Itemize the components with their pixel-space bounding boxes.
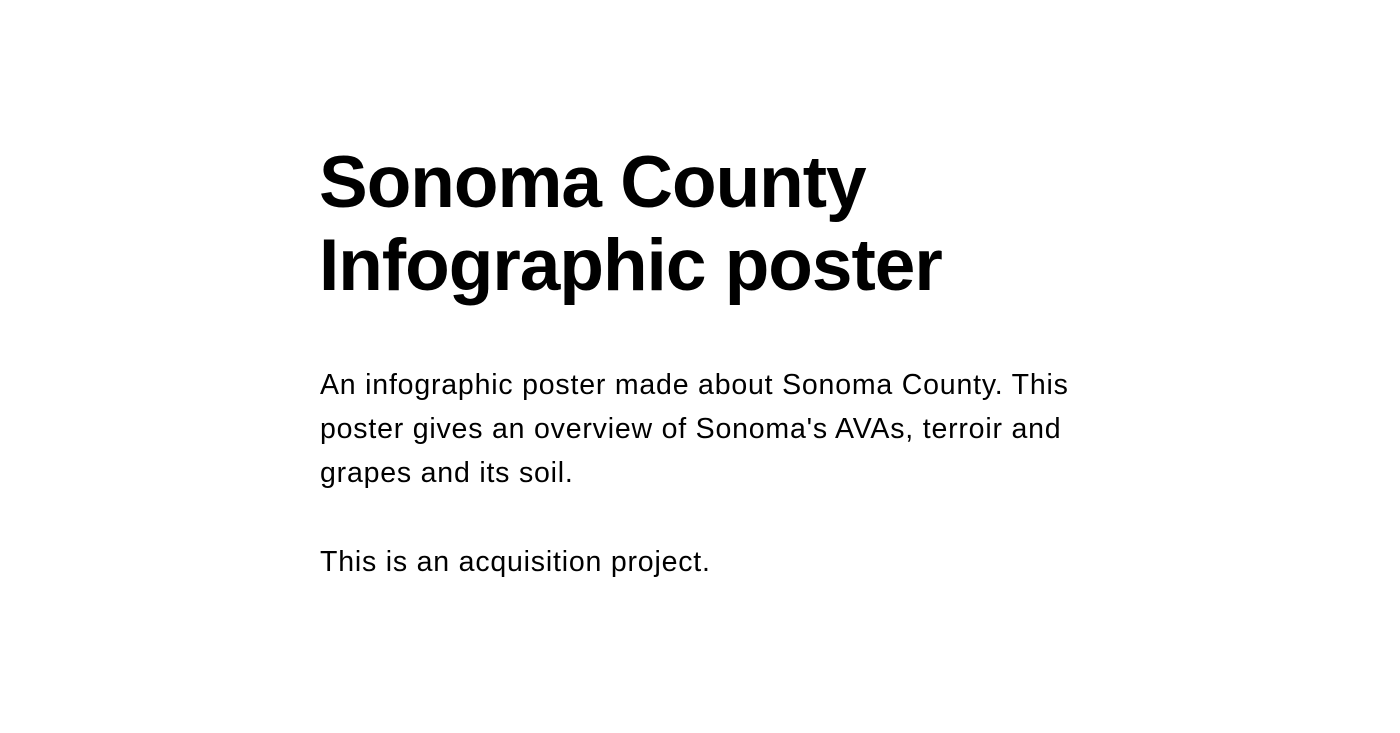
description text <box>320 369 1069 489</box>
description text: poster gives an overview of Sonoma's AVAs, terroir and <box>320 413 1061 445</box>
description text: An infographic poster made about Sonoma County. This <box>320 369 1069 401</box>
description text: grapes and its soil. <box>320 457 574 489</box>
title: Sonoma County <box>319 142 866 223</box>
title <box>319 142 942 306</box>
title: Infographic poster <box>319 225 942 306</box>
note text: This is an acquisition project. <box>320 546 711 578</box>
